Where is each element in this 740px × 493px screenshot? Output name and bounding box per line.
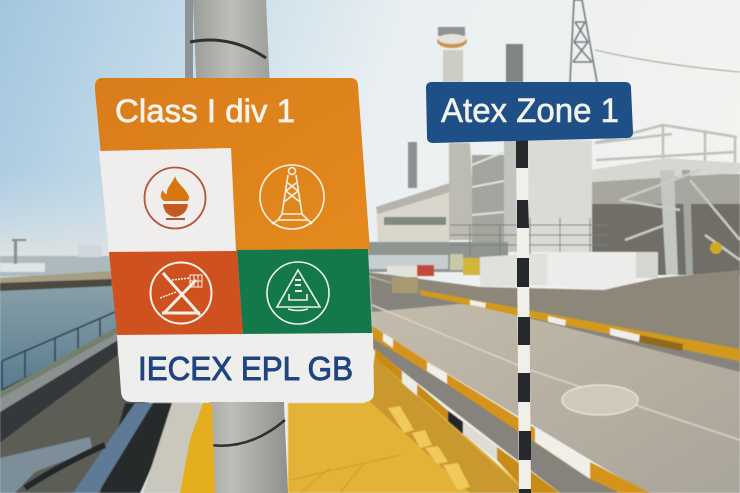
sign: Class I div 1 bbox=[95, 78, 374, 402]
sign: Atex Zone 1 bbox=[426, 82, 633, 143]
metal pole behind the orange sign bbox=[185, 0, 288, 493]
icon: flame in circle bbox=[144, 168, 206, 228]
icon: derrick tower in circle bbox=[260, 165, 324, 229]
scene: ground, gravel and road bbox=[288, 270, 740, 493]
sign panel: orange backing bbox=[95, 78, 370, 252]
blue sign panel bbox=[426, 82, 633, 143]
scene: harbour on the left bbox=[0, 239, 206, 493]
cell: white flame bbox=[99, 148, 236, 252]
icon: triangle in circle bbox=[267, 262, 329, 324]
heading: Class I div 1: Class I div 1 bbox=[115, 93, 295, 129]
cell: red explosion symbol bbox=[109, 251, 243, 335]
scene: plant buildings and towers bbox=[368, 0, 740, 290]
yellow handrail bbox=[180, 403, 215, 493]
black and white striped sign pole bbox=[516, 138, 531, 493]
cell: green protection level bbox=[237, 249, 372, 335]
bottom white panel bbox=[117, 333, 374, 402]
heading: Atex Zone 1: Atex Zone 1 bbox=[441, 92, 619, 130]
label: IECEX EPL GB: IECEX EPL GB bbox=[138, 350, 353, 387]
icon: crossed tools in circle bbox=[150, 262, 212, 324]
safety barrier stripes bbox=[372, 290, 740, 493]
